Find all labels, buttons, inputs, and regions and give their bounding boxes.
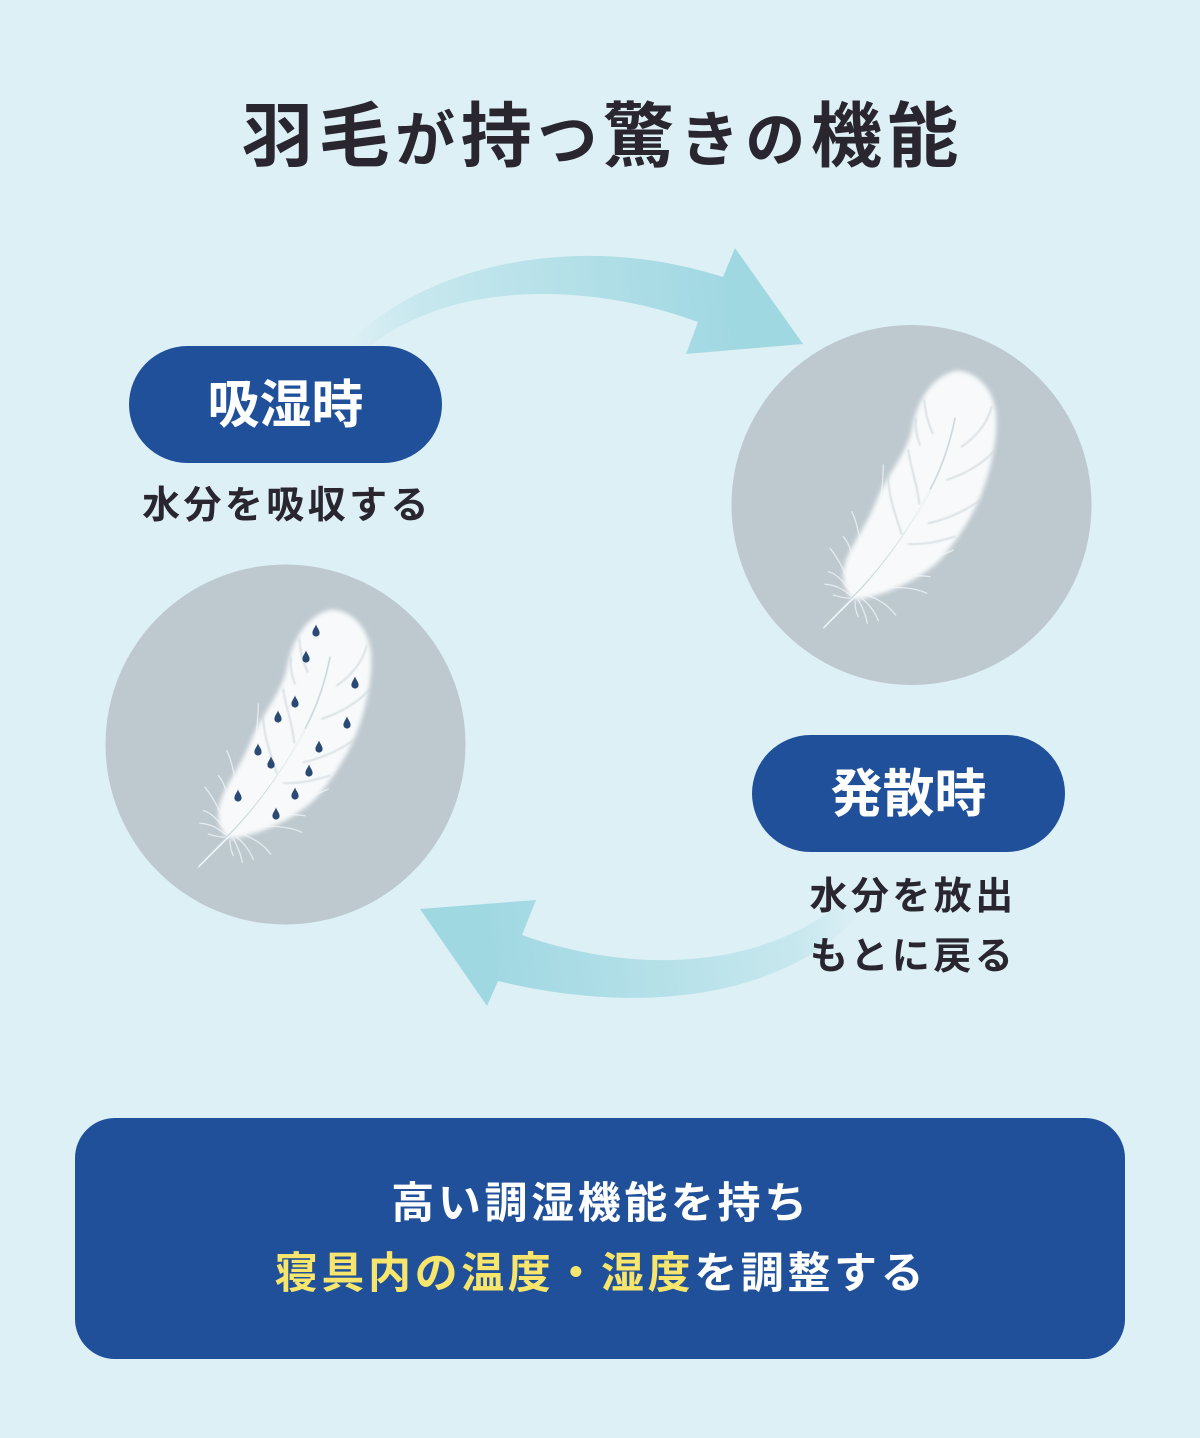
icon: water drops (234, 624, 359, 820)
pill: absorbing: 吸湿時 (207, 377, 364, 435)
title: 羽毛が持つ驚きの機能 (242, 98, 964, 177)
text: absorbs moisture: 水分を吸収する (142, 485, 432, 527)
icon: feather (198, 610, 371, 867)
arrow: top, absorbing to releasing (350, 248, 803, 354)
arrow: bottom, releasing to absorbing (420, 895, 868, 1006)
summary text: 寝具内の温度・湿度を調整する (275, 1250, 927, 1298)
pill: releasing: 発散時 (830, 766, 986, 824)
pill: absorbing (129, 346, 442, 463)
panel: summary (75, 1118, 1125, 1359)
pill: releasing (752, 735, 1065, 852)
circle: dry feather (732, 325, 1092, 685)
text: releases moisture (809, 876, 1016, 978)
summary text: 高い調湿機能を持ち (391, 1180, 811, 1228)
summary text (275, 1180, 927, 1298)
text: releases moisture: もとに戻る (810, 936, 1016, 978)
circle: moist feather with water drops (106, 564, 466, 924)
text: releases moisture: 水分を放出 (809, 876, 1016, 918)
icon: feather (823, 371, 996, 628)
